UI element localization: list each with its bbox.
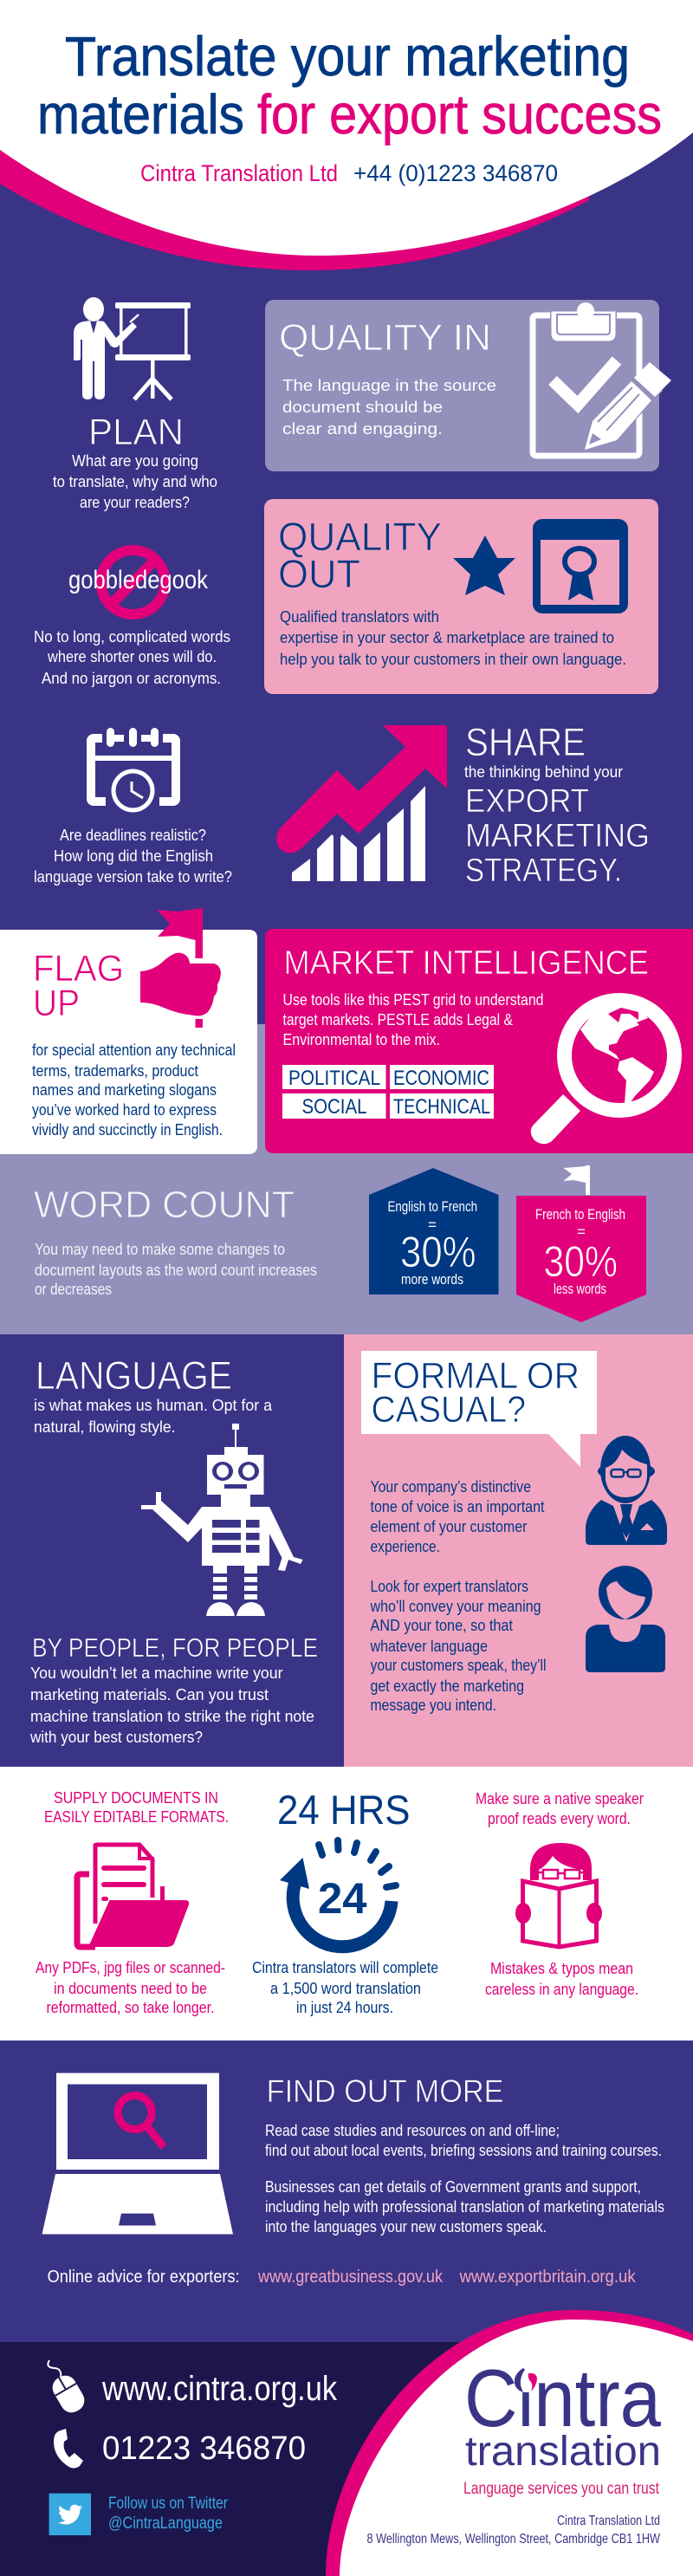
text: language body: is what makes us human. Opt for a bbox=[34, 1397, 273, 1414]
text: tone of voice: experience. bbox=[371, 1538, 440, 1555]
panel: footer bbox=[0, 2310, 693, 2576]
text: by people body: machine translation to strike the right note bbox=[30, 1708, 314, 1725]
panel: quality out bbox=[264, 499, 658, 694]
heading: supply documents bbox=[44, 1789, 229, 1826]
icon: no gobbledegook sign bbox=[68, 550, 209, 614]
text: 24 hour claim bbox=[252, 1959, 438, 2016]
text: no jargon: And no jargon or acronyms. bbox=[42, 670, 221, 687]
text: online advice links: www.greatbusiness.gov.uk bbox=[257, 2268, 444, 2287]
text: find out more body bbox=[265, 2122, 664, 2235]
text: find out more body: Read case studies and resources on and off-line; bbox=[265, 2122, 560, 2139]
text: no jargon: where shorter ones will do. bbox=[47, 648, 217, 665]
heading: native speaker: proof reads every word. bbox=[488, 1810, 631, 1827]
panel: language bbox=[0, 1334, 344, 1767]
heading: quality out: OUT bbox=[278, 552, 360, 596]
text: expert translators: who’ll convey your meaning bbox=[370, 1598, 541, 1615]
text: deadlines: How long did the English bbox=[54, 847, 213, 865]
text: expert translators: AND your tone, so that bbox=[371, 1617, 513, 1634]
text: expert translators: whatever language bbox=[370, 1638, 488, 1655]
heading: flag up bbox=[33, 948, 124, 1024]
text: tone of voice bbox=[371, 1478, 544, 1555]
panel: find out more bbox=[0, 2041, 693, 2342]
callout: french to english: less words bbox=[554, 1281, 606, 1297]
text: flag up body: vividly and succinctly in English. bbox=[32, 1121, 223, 1139]
text: word count body bbox=[35, 1241, 317, 1298]
text: expert translators: your customers speak, they’ll bbox=[371, 1657, 546, 1674]
callout: french to english: French to English bbox=[535, 1206, 625, 1223]
heading: find out more: FIND OUT MORE bbox=[267, 2073, 504, 2109]
heading: market intelligence: MARKET INTELLIGENCE bbox=[284, 944, 649, 982]
chart: PEST grid: SOCIAL bbox=[301, 1095, 367, 1119]
text: quality out body: Qualified translators with bbox=[280, 608, 439, 626]
text: pdf warning: in documents need to be bbox=[54, 1980, 207, 1997]
title bbox=[37, 25, 662, 146]
heading: supply documents: EASILY EDITABLE FORMATS. bbox=[44, 1808, 229, 1826]
text: by people body bbox=[29, 1664, 314, 1746]
chart: PEST grid: TECHNICAL bbox=[393, 1095, 490, 1119]
text: website: www.cintra.org.uk bbox=[101, 2370, 338, 2408]
callout: english to french: English to French bbox=[388, 1198, 477, 1215]
text: by people body: with your best customers? bbox=[29, 1729, 203, 1746]
callout: english to french: = bbox=[428, 1217, 437, 1233]
logo: cintra translation: Cintra bbox=[464, 2352, 662, 2443]
text: pdf warning: reformatted, so take longer. bbox=[47, 1999, 215, 2016]
text: share: EXPORT bbox=[465, 783, 589, 820]
icon: certificate bbox=[533, 519, 628, 613]
top page background bbox=[0, 0, 693, 1024]
text: 24 hour claim: a 1,500 word translation bbox=[270, 1980, 421, 1997]
callout: english to french bbox=[369, 1168, 499, 1294]
icon: telephone bbox=[54, 2429, 83, 2468]
icon: hand holding flag bbox=[140, 908, 221, 1028]
heading: 24 hrs: 24 HRS bbox=[277, 1787, 411, 1833]
text: quality out body: expertise in your sector & marketplace are trained to bbox=[280, 629, 614, 646]
text: market intelligence body bbox=[282, 991, 544, 1048]
footer swoosh bbox=[326, 2310, 693, 2576]
text block: plan: PLAN bbox=[88, 412, 184, 453]
text: 24 hour claim: Cintra translators will complete bbox=[252, 1959, 438, 1976]
text: share: STRATEGY. bbox=[465, 853, 622, 889]
callout: french to english: 30% bbox=[544, 1237, 618, 1286]
title: materials bbox=[37, 83, 244, 146]
text: mistakes bbox=[485, 1960, 638, 1998]
icon: clipboard with pencil bbox=[533, 302, 671, 456]
icon: person reading book bbox=[515, 1843, 602, 1947]
header swoosh bbox=[0, 0, 693, 270]
text block: plan: to translate, why and who bbox=[53, 473, 217, 490]
heading: flag up: FLAG bbox=[33, 948, 124, 990]
callout: speech bubble: FORMAL OR bbox=[371, 1355, 580, 1397]
text: share: the thinking behind your bbox=[464, 763, 623, 781]
icon: man with glasses bbox=[586, 1436, 667, 1545]
text: expert translators: Look for expert translators bbox=[371, 1578, 528, 1595]
heading: quality in: QUALITY IN bbox=[279, 317, 491, 359]
heading: by people for people: BY PEOPLE, FOR PEOPLE bbox=[32, 1632, 318, 1663]
chart: PEST grid: ECONOMIC bbox=[393, 1067, 489, 1090]
text: find out more body: into the languages your new customers speak. bbox=[265, 2218, 547, 2235]
callout: speech bubble: CASUAL? bbox=[371, 1389, 526, 1431]
icon: robot bbox=[141, 1424, 303, 1616]
icon: presenter at board bbox=[74, 297, 191, 399]
callout: english to french: 30% bbox=[400, 1228, 476, 1276]
text: quality out body bbox=[280, 608, 626, 668]
text: 24 hour claim: in just 24 hours. bbox=[296, 1999, 393, 2016]
text: mistakes: careless in any language. bbox=[485, 1981, 638, 1998]
text: expert translators: message you intend. bbox=[371, 1697, 496, 1714]
text: word count body: You may need to make some changes to bbox=[35, 1241, 285, 1258]
callout: french to english: = bbox=[577, 1223, 586, 1240]
panel: white tips band bbox=[0, 1767, 693, 2041]
text: market intelligence body: Environmental to the mix. bbox=[282, 1031, 440, 1048]
text: tone of voice: Your company’s distinctive bbox=[371, 1478, 531, 1496]
subtitle contact line: +44 (0)1223 346870 bbox=[353, 160, 558, 186]
panel: formal or casual bbox=[344, 1334, 693, 1767]
text: flag up body: you’ve worked hard to express bbox=[32, 1101, 217, 1119]
heading: word count: WORD COUNT bbox=[34, 1184, 295, 1226]
heading: language: LANGUAGE bbox=[36, 1353, 232, 1398]
text: market intelligence body: target markets. PESTLE adds Legal & bbox=[282, 1011, 513, 1028]
text: twitter handle: Follow us on Twitter bbox=[108, 2495, 229, 2513]
heading: native speaker bbox=[476, 1790, 644, 1827]
text: by people body: marketing materials. Can you trust bbox=[30, 1686, 269, 1703]
text: pdf warning: Any PDFs, jpg files or scanned- bbox=[36, 1959, 225, 1976]
text: flag up body bbox=[32, 1041, 236, 1139]
text: online advice links: www.exportbritain.org.uk bbox=[459, 2268, 637, 2287]
text block: plan bbox=[53, 412, 217, 511]
callout: speech bubble bbox=[361, 1351, 597, 1467]
heading: supply documents: SUPPLY DOCUMENTS IN bbox=[54, 1789, 218, 1807]
callout: french to english bbox=[516, 1165, 646, 1322]
text: word count body: or decreases bbox=[35, 1281, 112, 1298]
text: deadlines: language version take to write? bbox=[34, 868, 232, 886]
text: tone of voice: tone of voice is an important bbox=[371, 1498, 544, 1515]
heading: flag up: UP bbox=[33, 983, 80, 1024]
heading: quality out: QUALITY bbox=[278, 515, 442, 559]
text: expert translators bbox=[370, 1578, 546, 1714]
panel: quality in bbox=[265, 300, 671, 471]
icon: white flag bbox=[563, 1165, 590, 1195]
text: share bbox=[464, 720, 650, 889]
text: phone number: 01223 346870 bbox=[102, 2430, 306, 2467]
word count background band bbox=[0, 1024, 693, 1334]
text: quality in body: clear and engaging. bbox=[282, 420, 443, 438]
text: no jargon bbox=[34, 628, 230, 687]
text: market intelligence body: Use tools like this PEST grid to understand bbox=[282, 991, 544, 1009]
icon: magnifier over globe bbox=[531, 993, 682, 1144]
icon: computer mouse bbox=[48, 2360, 88, 2417]
icon: star bbox=[453, 535, 515, 595]
logo: cintra translation bbox=[463, 2352, 662, 2498]
text: expert translators: get exactly the marketing bbox=[371, 1677, 524, 1695]
text block: plan: are your readers? bbox=[80, 494, 190, 511]
text: twitter handle: @CintraLanguage bbox=[108, 2514, 223, 2533]
icon: woman bbox=[586, 1566, 665, 1672]
icon: 24 hour clock: 24 bbox=[318, 1874, 367, 1923]
text: word count body: document layouts as the word count increases bbox=[35, 1262, 317, 1279]
text: online advice links: Online advice for exporters: bbox=[48, 2268, 240, 2287]
text: quality in body: The language in the source bbox=[282, 377, 496, 394]
icon: rising arrow and bars bbox=[276, 725, 447, 881]
panel: market intelligence bbox=[265, 929, 693, 1153]
icon: twitter bbox=[49, 2494, 91, 2535]
icon: laptop with magnifier bbox=[42, 2073, 233, 2234]
icon: calendar with clock bbox=[91, 728, 176, 813]
text: share: SHARE bbox=[465, 720, 586, 764]
text: twitter handle bbox=[108, 2495, 229, 2533]
icon: folder with document bbox=[77, 1844, 189, 1947]
text: online advice links bbox=[48, 2268, 637, 2287]
logo: cintra translation: translation bbox=[465, 2429, 661, 2475]
text: address bbox=[367, 2514, 661, 2547]
panel: flag up bbox=[0, 908, 257, 1154]
heading: quality out bbox=[278, 515, 442, 596]
text: flag up body: terms, trademarks, product bbox=[32, 1062, 198, 1080]
text: mistakes: Mistakes & typos mean bbox=[490, 1960, 633, 1977]
text: flag up body: for special attention any technical bbox=[32, 1041, 236, 1059]
text: tone of voice: element of your customer bbox=[371, 1518, 528, 1535]
title: Translate your marketing bbox=[65, 25, 630, 88]
icon: no gobbledegook sign: gobbledegook bbox=[68, 566, 209, 594]
text: no jargon: No to long, complicated words bbox=[34, 628, 230, 646]
text: by people body: You wouldn’t let a machine write your bbox=[30, 1664, 283, 1682]
text: deadlines bbox=[34, 827, 232, 886]
text: pdf warning bbox=[36, 1959, 225, 2016]
callout: english to french: more words bbox=[401, 1271, 463, 1288]
text: language body bbox=[34, 1397, 273, 1436]
text: quality in body: document should be bbox=[282, 399, 443, 416]
text: deadlines: Are deadlines realistic? bbox=[60, 827, 206, 844]
heading: native speaker: Make sure a native speaker bbox=[476, 1790, 644, 1807]
text: quality in body bbox=[282, 377, 496, 438]
text: language body: natural, flowing style. bbox=[34, 1418, 175, 1436]
icon: 24 hour clock bbox=[280, 1840, 396, 1947]
text block: plan: What are you going bbox=[72, 452, 198, 470]
text: address: Cintra Translation Ltd bbox=[557, 2514, 660, 2528]
text: find out more body: Businesses can get details of Government grants and support, bbox=[265, 2178, 641, 2196]
subtitle contact line: Cintra Translation Ltd bbox=[140, 160, 338, 186]
subtitle contact line bbox=[140, 160, 558, 186]
chart: PEST grid: POLITICAL bbox=[288, 1067, 380, 1090]
chart: PEST grid bbox=[282, 1065, 494, 1119]
text: share: MARKETING bbox=[465, 818, 650, 854]
text: quality out body: help you talk to your customers in their own language. bbox=[280, 651, 626, 668]
text: flag up body: names and marketing slogans bbox=[32, 1081, 217, 1099]
